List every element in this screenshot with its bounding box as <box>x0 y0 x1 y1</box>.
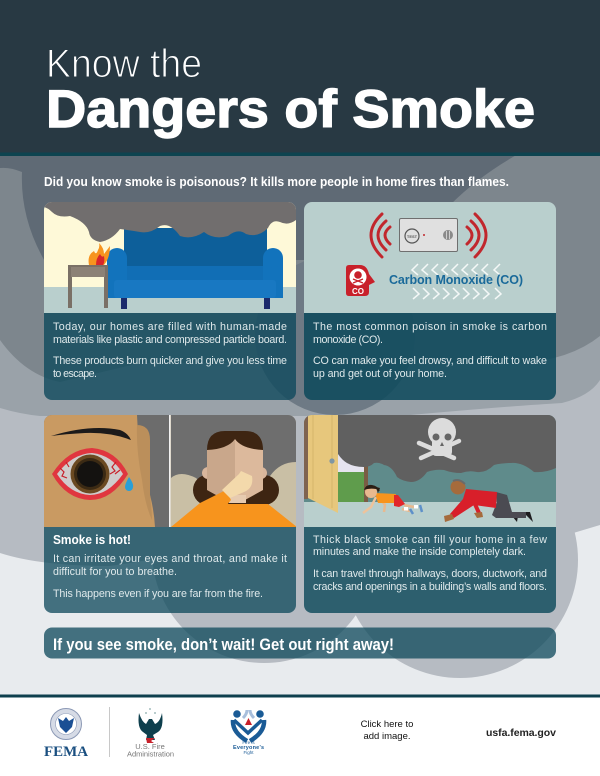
logo: Fire is Everyone's Fight: Fire is <box>242 740 255 745</box>
text block <box>304 313 556 400</box>
intro heading: Did you know smoke is poisonous? It kills more people in home fires than flames. <box>44 174 509 189</box>
illustration: CO alarm: TEST <box>407 234 418 239</box>
text block: This happens even if you are far from the fire. <box>53 588 263 600</box>
icon: CO poison badge <box>346 265 375 296</box>
footer <box>0 694 600 776</box>
logo: U.S. Fire Administration <box>127 708 174 758</box>
illustration: CO alarm <box>304 202 556 313</box>
title: Dangers of Smoke <box>46 80 535 139</box>
text block: cracks and openings in a building’s walls and floors. <box>313 581 547 593</box>
image placeholder text <box>361 719 413 742</box>
image placeholder text: Click here to <box>361 719 413 730</box>
text block: It can travel through hallways, doors, ductwork, and <box>313 568 547 580</box>
figure: crawling child <box>363 485 422 514</box>
illustration: couch under smoke <box>44 202 296 313</box>
text block: materials like plastic and compressed particle board. <box>53 334 287 346</box>
title <box>46 42 535 139</box>
panel: modern materials <box>44 202 296 400</box>
icon: CO poison badge: CO <box>352 287 364 296</box>
panel: smoke is hot <box>44 415 297 613</box>
illustration: CO alarm: Carbon Monoxide (CO) <box>389 273 523 287</box>
panel: carbon monoxide <box>304 202 556 400</box>
text block: The most common poison in smoke is carbon <box>313 321 547 333</box>
text block: It can irritate your eyes and throat, and make it <box>53 553 287 565</box>
text block: Smoke is hot! <box>53 532 131 547</box>
header band <box>0 0 600 156</box>
text block <box>44 313 296 400</box>
image placeholder text: add image. <box>363 731 411 742</box>
logo: Fire is Everyone's Fight: Fight <box>243 750 254 755</box>
title: Know the <box>46 42 202 86</box>
panel: thick black smoke <box>304 415 556 613</box>
text block: monoxide (CO). <box>313 334 383 346</box>
logo: U.S. Fire Administration: U.S. Fire <box>135 742 165 751</box>
icon: skull and crossbones <box>419 418 459 458</box>
text block: difficult for you to breathe. <box>53 566 177 578</box>
text block: These products burn quicker and give you less time <box>53 355 287 367</box>
text block <box>304 527 556 613</box>
call to action bar: If you see smoke, don’t wait! Get out right away! <box>53 635 394 654</box>
illustration: irritated eye <box>44 415 169 527</box>
call to action bar <box>44 628 556 658</box>
text block: up and get out of your home. <box>313 368 447 380</box>
text block: CO can make you feel drowsy, and difficult to wake <box>313 355 547 367</box>
text block: minutes and make the inside completely dark. <box>313 546 526 558</box>
text block: Thick black smoke can fill your home in a few <box>313 534 547 546</box>
logo: FEMA: FEMA <box>44 744 88 760</box>
text block: Today, our homes are filled with human-made <box>53 321 287 333</box>
figure: crawling adult <box>444 480 533 522</box>
text block: to escape. <box>53 368 97 380</box>
logo: FEMA <box>44 708 88 760</box>
logo: Fire is Everyone's Fight: Everyone’s <box>233 745 264 751</box>
logo: Fire is Everyone's Fight <box>233 710 264 755</box>
logo: U.S. Fire Administration: Administration <box>127 750 174 758</box>
illustration: person covering mouth <box>169 415 297 527</box>
text block <box>44 527 296 613</box>
background: smoke clouds <box>0 153 600 695</box>
illustration: crawling under smoke <box>304 415 556 527</box>
website: usfa.fema.gov <box>486 727 556 739</box>
